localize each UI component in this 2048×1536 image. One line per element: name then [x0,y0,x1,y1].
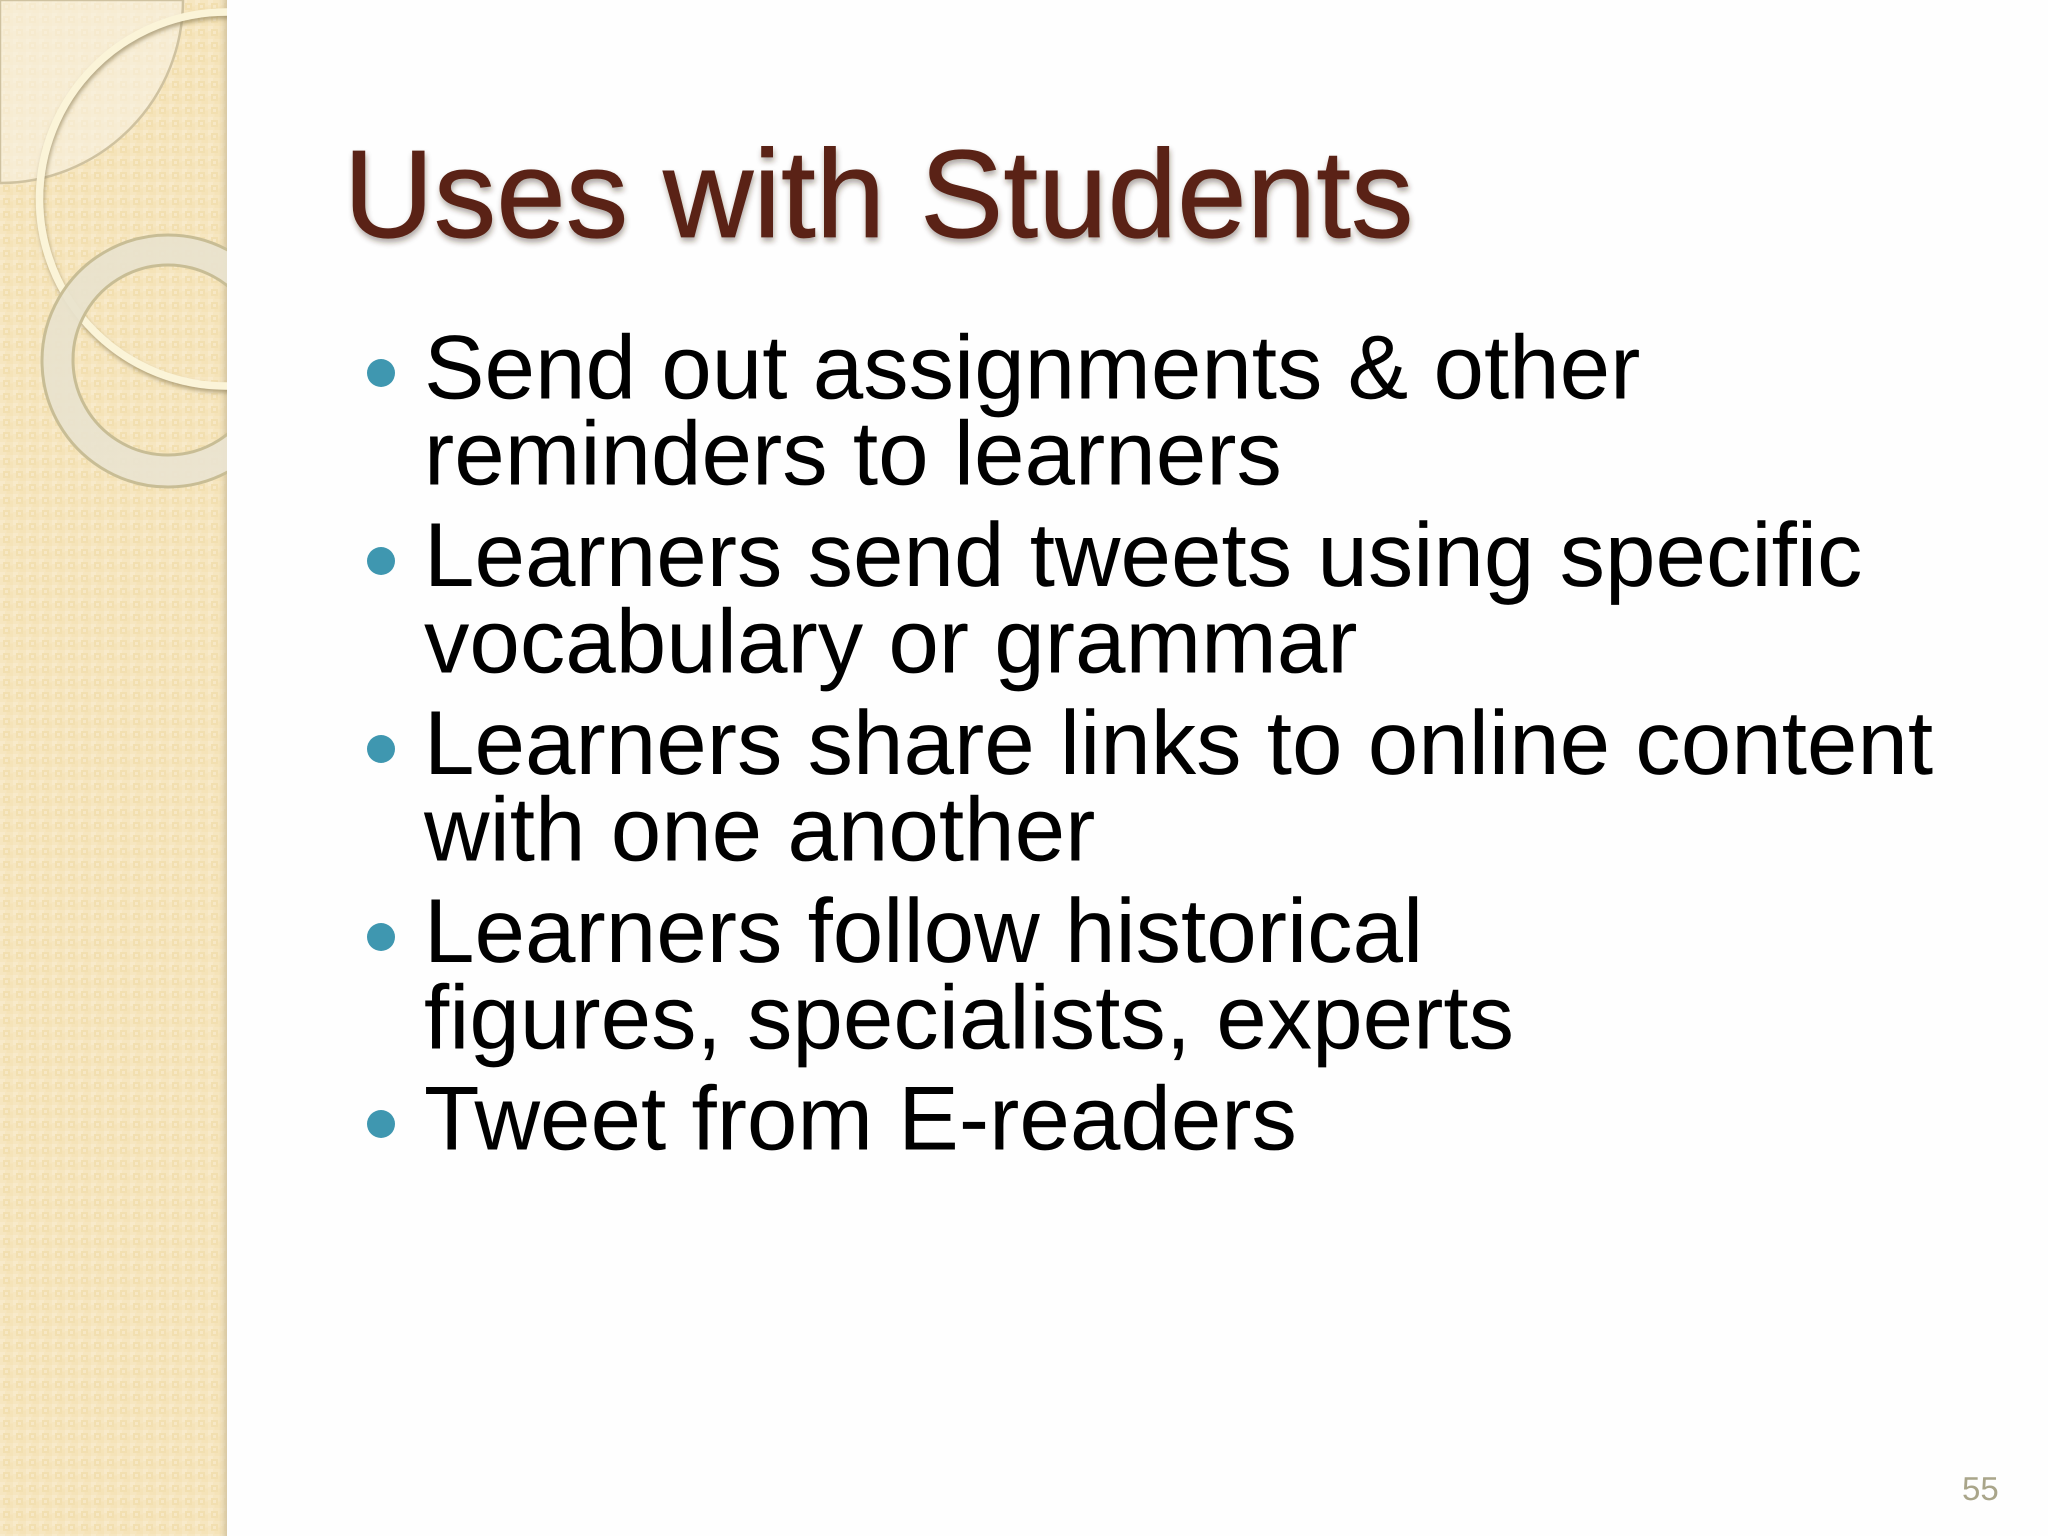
panel: decorative sidebar [0,0,227,1536]
bullet item 5: Tweet from E-readers [424,1068,1297,1170]
bullet item 2: vocabulary or grammar [424,592,1358,692]
bullet item 2: Learners send tweets using specific [424,505,1862,606]
bullet item 1: reminders to learners [424,404,1282,504]
page number: 55 [1962,1470,1999,1507]
bullet item 1: Send out assignments & other [424,318,1640,418]
bullet item 3: Learners share links to online content [424,693,1933,794]
bullet item 4: Learners follow historical [424,881,1423,982]
bullet item 3 [367,693,1933,880]
bullet item 3: with one another [423,780,1095,880]
title: Uses with Students [344,125,1413,264]
bullet item 4 [367,881,1514,1068]
bullet list [367,318,1933,1170]
bullet item 4: figures, specialists, experts [424,968,1514,1068]
bullet item 1 [367,318,1640,504]
bullet item 2 [367,505,1862,692]
